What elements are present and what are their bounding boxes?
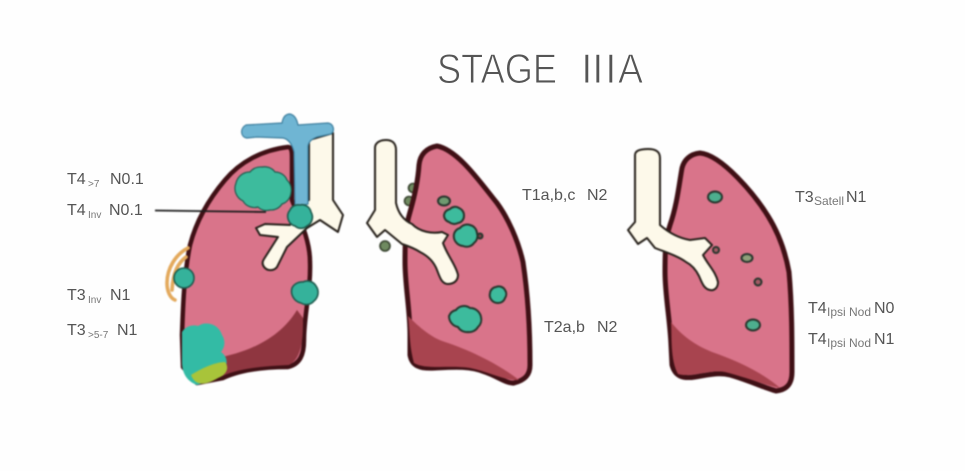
label: T4 Inv N0.1: N0.1: [109, 202, 143, 219]
lung lower shaded lobe: [408, 316, 519, 380]
icon: orange rib: [167, 248, 188, 300]
tumor: upper mass: [235, 167, 291, 211]
tumor: hilar: [288, 205, 312, 228]
label: T3 >5-7 N1: T3: [67, 322, 86, 339]
lung lower shaded lobe: [671, 322, 780, 388]
label: T3 Inv N1: N1: [110, 287, 131, 304]
tumor: base: [182, 323, 227, 385]
label: T3 >5-7 N1: >5-7: [88, 330, 109, 341]
label: T3 Satell N1: Satell: [814, 194, 844, 208]
lung lower shaded lobe: [222, 310, 303, 376]
tumor cluster: [438, 196, 506, 332]
panel: right lung: [628, 149, 792, 391]
tumor: green base: [191, 362, 227, 384]
tumor: chest wall: [174, 268, 194, 288]
lung body: [665, 153, 792, 391]
lung body: [405, 146, 530, 383]
label: T4 Ipsi Nod N1: T4: [808, 331, 827, 348]
label: T3 >5-7 N1: N1: [117, 322, 138, 339]
label: T2a,b N2: N2: [597, 319, 618, 336]
label: T1a,b,c N2: T1a,b,c: [522, 187, 575, 204]
panel: left lung: [155, 114, 343, 385]
nodes outside lung: [380, 184, 418, 251]
lung body: [182, 147, 310, 383]
label: T4 >7 N0.1: N0.1: [110, 171, 144, 188]
label: T2a,b N2: T2a,b: [544, 319, 585, 336]
label: T4 Ipsi Nod N0: Ipsi Nod: [827, 305, 871, 319]
pointer line: [155, 210, 266, 212]
title: STAGE: [437, 45, 557, 92]
label: T4 >7 N0.1: T4: [67, 171, 86, 188]
label: T3 Inv N1: Inv: [88, 295, 101, 306]
label: T3 Inv N1: T3: [67, 287, 86, 304]
panel: middle lung: [367, 140, 530, 383]
icon: white bronchus: [628, 149, 718, 290]
label: T4 Ipsi Nod N0: N0: [874, 300, 895, 317]
label: T4 >7 N0.1: >7: [88, 179, 100, 190]
label: T4 Ipsi Nod N1: Ipsi Nod: [827, 336, 871, 350]
label: T4 Ipsi Nod N1: N1: [874, 331, 895, 348]
title: A: [618, 45, 643, 92]
label: T4 Inv N0.1: Inv: [88, 210, 101, 221]
icon: blue vessel: [242, 114, 333, 207]
title: III: [581, 45, 617, 92]
label: T3 Satell N1: N1: [846, 189, 867, 206]
label: T1a,b,c N2: N2: [587, 187, 608, 204]
icon: white bronchus: [256, 133, 343, 270]
nodules: [708, 192, 762, 330]
icon: white bronchus: [367, 140, 458, 284]
tumor: mediastinal: [292, 281, 318, 305]
label: T4 Inv N0.1: T4: [67, 202, 86, 219]
title: [437, 45, 643, 92]
label: T4 Ipsi Nod N0: T4: [808, 300, 827, 317]
label: T3 Satell N1: T3: [795, 189, 814, 206]
